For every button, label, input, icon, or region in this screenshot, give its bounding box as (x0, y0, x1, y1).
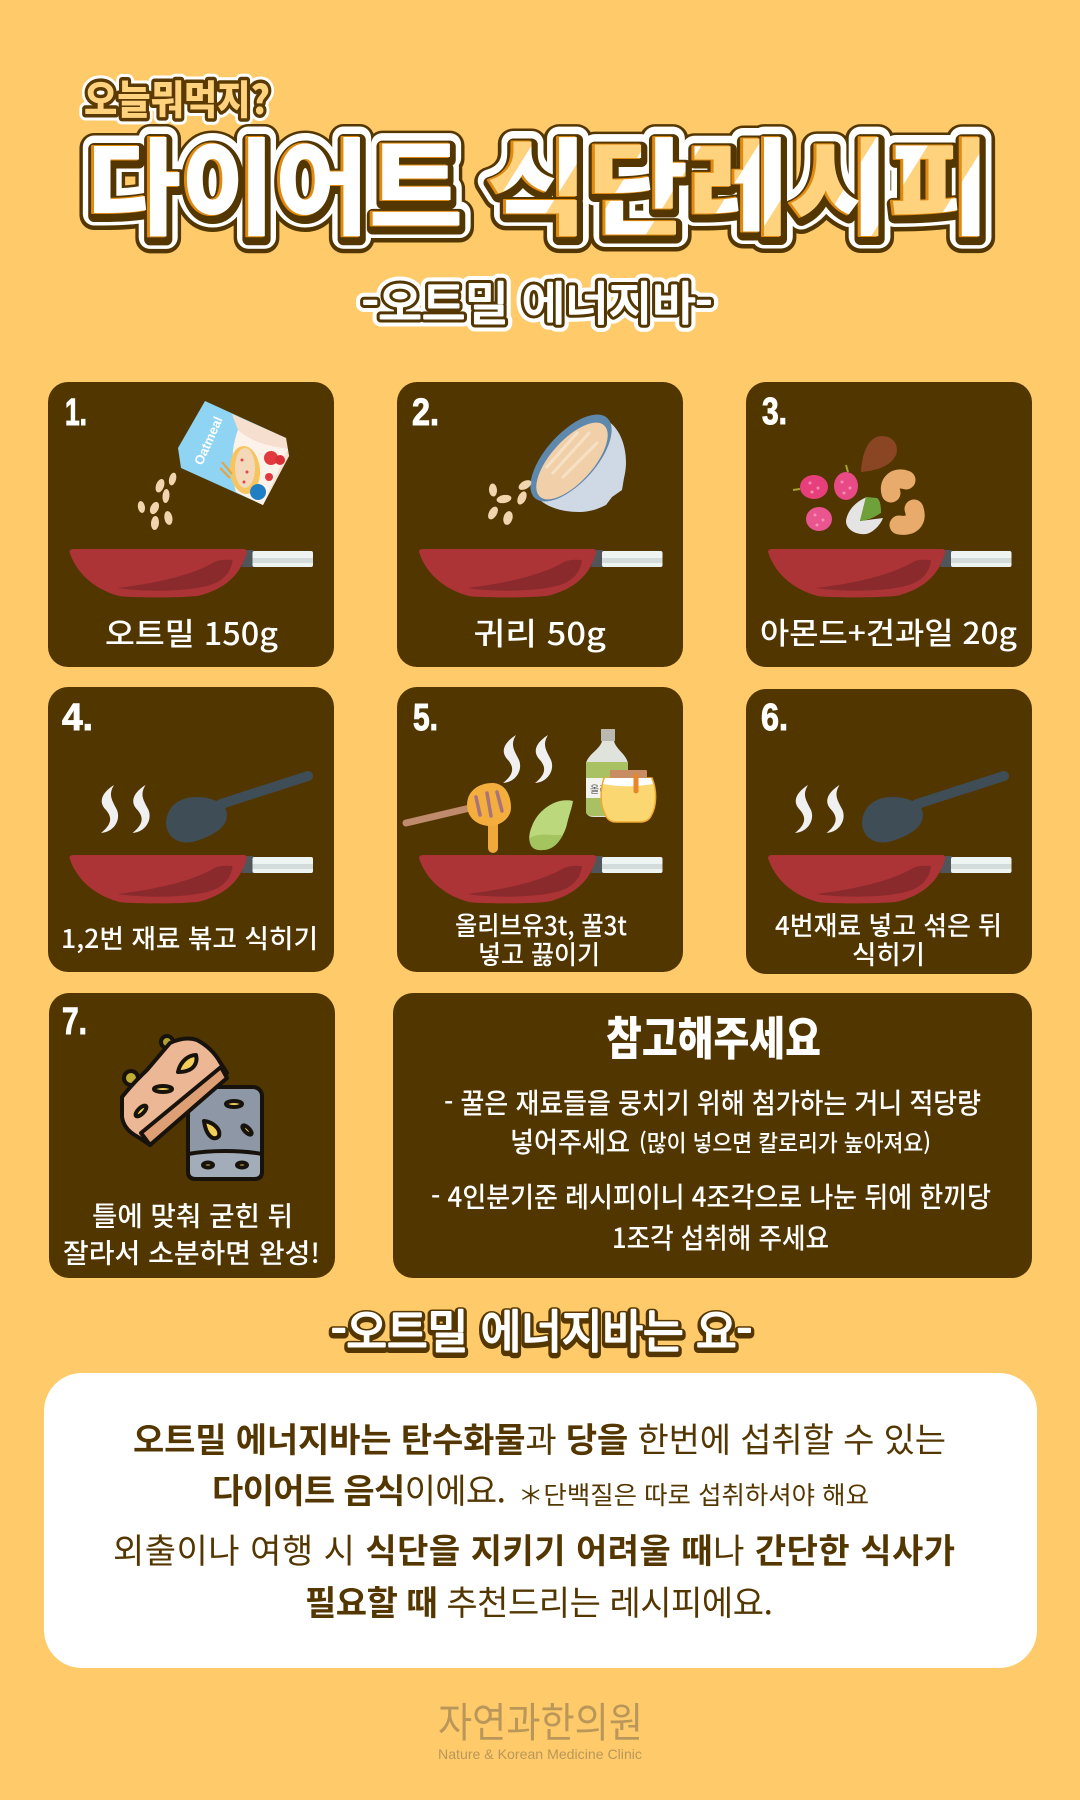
caption: 올리브유3t, 꿀3t (455, 906, 627, 943)
logo: clinic name: Nature & Korean Medicine Clinic (438, 1746, 642, 1762)
caption: 오트밀 150g (105, 609, 278, 654)
section heading: 오트밀 에너지바는 요: -오트밀 에너지바는 요- (331, 1296, 752, 1362)
icon: nuts and berries (793, 436, 915, 534)
title: 다이어트 식단레시피: 다이어트 (87, 106, 463, 258)
icon: frying pan (768, 855, 1012, 903)
title: 다이어트 식단레시피 (85, 105, 990, 260)
caption (63, 1195, 320, 1271)
description line 4: 필요할 때 추천드리는 레시피에요. (305, 1576, 773, 1625)
step number 6: 6. (761, 697, 788, 739)
description line 2: ＊단백질은 따로 섭취하셔야 해요 (518, 1476, 869, 1512)
description line 3: 외출이나 여행 시 식단을 지키기 어려울 때나 간단한 식사가 (113, 1524, 955, 1573)
title: 다이어트 식단레시피: 식단레시피 (487, 108, 990, 260)
step number 3: 3. (762, 391, 787, 433)
subtitle: 오트밀 에너지바: -오트밀 에너지바- (362, 268, 712, 334)
title: 다이어트 식단레시피: 다이어트 (87, 105, 463, 257)
icon: steam (101, 785, 150, 833)
panel: step 7 (49, 993, 335, 1278)
panel: notes (393, 993, 1032, 1278)
note 2 (431, 1176, 991, 1257)
icon: bowl of oats (516, 401, 626, 515)
icon: oil drop (529, 800, 573, 850)
eyebrow: 오늘뭐먹지?: 오늘뭐먹지? (84, 68, 270, 126)
icon: frying pan (768, 549, 1012, 597)
caption (455, 906, 627, 972)
note 1: 넣어주세요 (510, 1121, 630, 1161)
section heading: 오트밀 에너지바는 요: -오트밀 에너지바는 요- (331, 1298, 752, 1364)
icon: spatula (166, 776, 308, 842)
title: 다이어트 식단레시피: 다이어트 (87, 107, 463, 259)
caption: 1,2번 재료 볶고 식히기 (61, 919, 318, 956)
icon: falling oats (486, 478, 533, 526)
title: 다이어트 식단레시피: 식단레시피 (487, 107, 990, 259)
caption: 식히기 (852, 935, 925, 972)
note 2: 1조각 섭취해 주세요 (612, 1217, 829, 1257)
icon: spatula (862, 776, 1004, 842)
panel: step 2 (397, 382, 683, 667)
caption: 넣고 끓이기 (478, 935, 600, 972)
heading: 참고해주세요 (606, 1003, 821, 1069)
description line 2 (212, 1464, 869, 1513)
icon: oatmeal box (178, 401, 289, 505)
caption: 귀리 50g (474, 609, 606, 654)
panel: step 4 (48, 687, 334, 972)
panel: step 5 (397, 687, 683, 972)
note 1: - 꿀은 재료들을 뭉치기 위해 첨가하는 거니 적당량 (444, 1082, 981, 1122)
icon: falling oats (137, 472, 178, 530)
title: 다이어트 식단레시피: 식단레시피 (485, 105, 988, 257)
description line 2: 다이어트 음식이에요. (212, 1464, 506, 1513)
icon: energy bars (122, 1036, 262, 1179)
subtitle: 오트밀 에너지바: -오트밀 에너지바- (362, 268, 712, 334)
step number 4: 4. (62, 697, 93, 739)
panel: description (44, 1373, 1037, 1668)
subtitle: 오트밀 에너지바: -오트밀 에너지바- (362, 268, 712, 334)
caption: 아몬드+건과일 20g (760, 609, 1017, 653)
eyebrow: 오늘뭐먹지?: 오늘뭐먹지? (84, 68, 270, 126)
caption: 틀에 맞춰 굳힌 뒤 (92, 1195, 293, 1234)
icon: honey jar (601, 770, 656, 822)
note 1: (많이 넣으면 칼로리가 높아져요) (639, 1124, 931, 1158)
icon: frying pan (419, 855, 662, 903)
step number 7: 7. (62, 1001, 87, 1043)
icon: frying pan (70, 549, 313, 597)
panel: step 3 (746, 382, 1032, 667)
note 1 (444, 1082, 981, 1161)
caption: 4번재료 넣고 섞은 뒤 (775, 906, 1002, 943)
title: 다이어트 식단레시피: 다이어트 (87, 108, 463, 260)
caption: 잘라서 소분하면 완성! (63, 1232, 320, 1271)
eyebrow: 오늘뭐먹지?: 오늘뭐먹지? (84, 68, 270, 126)
icon: olive oil bottle: 올리 (590, 781, 608, 796)
title: 다이어트 식단레시피: 식단레시피 (487, 105, 990, 257)
icon: frying pan (70, 855, 313, 903)
icon: oatmeal box: Oatmeal (191, 414, 226, 467)
caption (775, 906, 1002, 972)
icon: honey dipper (406, 783, 511, 848)
icon: steam (795, 785, 844, 833)
icon: olive oil bottle (586, 729, 628, 817)
panel: step 1 (48, 382, 334, 667)
title: 다이어트 식단레시피: 식단레시피 (487, 106, 990, 258)
icon: frying pan (419, 549, 662, 597)
step number 1: 1. (65, 392, 87, 434)
title: 다이어트 식단레시피: 다이어트 (85, 105, 461, 257)
logo: clinic name: 자연과한의원 (438, 1689, 643, 1749)
icon: steam (503, 735, 552, 783)
panel: step 6 (746, 689, 1032, 974)
step number 5: 5. (413, 697, 438, 739)
note 2: - 4인분기준 레시피이니 4조각으로 나눈 뒤에 한끼당 (431, 1176, 991, 1216)
description line 1: 오트밀 에너지바는 탄수화물과 당을 한번에 섭취할 수 있는 (133, 1413, 946, 1462)
step number 2: 2. (412, 392, 439, 434)
